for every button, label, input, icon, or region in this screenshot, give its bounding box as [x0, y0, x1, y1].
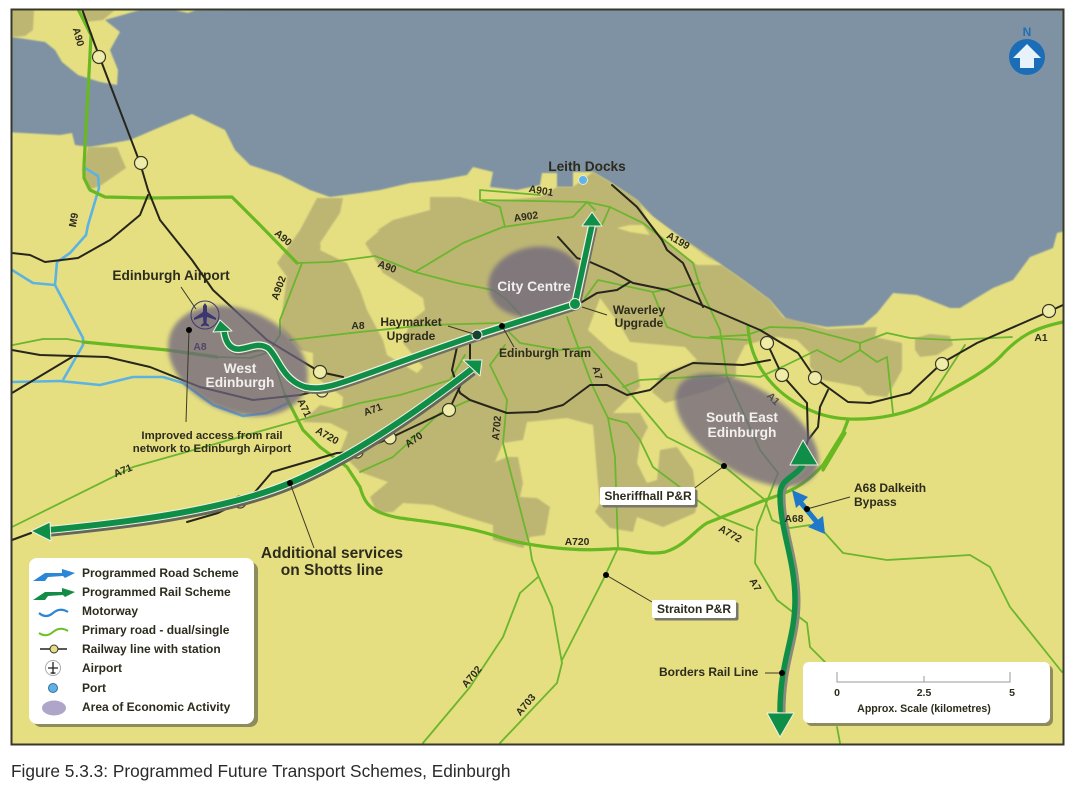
label: Haymarket Upgrade: Haymarket	[380, 315, 442, 329]
road labels: A772	[716, 524, 743, 545]
label: West Edinburgh: Edinburgh	[206, 375, 274, 390]
icon: airport	[191, 301, 219, 329]
scale box: 2.5	[917, 687, 931, 699]
label: West Edinburgh: West	[224, 361, 257, 376]
label: South East Edinburgh: Edinburgh	[708, 425, 776, 440]
label: A68 Dalkeith Bypass: Bypass	[854, 495, 897, 509]
area of economic activity: West Edinburgh	[166, 303, 310, 419]
legend	[29, 558, 258, 727]
label: improved access: Improved access from rail	[141, 430, 283, 442]
legend: motorway: Motorway	[82, 604, 138, 618]
road labels: A702	[460, 664, 485, 690]
legend: airport: Airport	[82, 661, 122, 675]
road labels: M9	[68, 212, 81, 228]
road labels: A8	[351, 321, 365, 332]
road labels: A68	[785, 514, 804, 525]
label: Waverley Upgrade: Upgrade	[615, 316, 664, 330]
label: Waverley Upgrade: Waverley	[613, 303, 665, 317]
label: Leith Docks: Leith Docks	[548, 159, 626, 174]
road labels: A8	[193, 342, 207, 353]
urban areas	[12, 10, 953, 548]
label: A68 Dalkeith Bypass: A68 Dalkeith	[854, 481, 926, 495]
label: Edinburgh Airport: Edinburgh Airport	[112, 268, 230, 283]
area of economic activity: City Centre	[486, 244, 580, 318]
icon: north arrow: N	[1023, 25, 1031, 39]
yellow pockets within urban area	[320, 205, 722, 373]
label: City Centre: City Centre	[497, 279, 571, 294]
legend: railway line with station: Railway line with station	[82, 642, 221, 656]
label: Straiton P&R	[652, 600, 738, 620]
road labels: A7	[589, 365, 604, 381]
area of economic activity: South East Edinburgh	[672, 371, 822, 489]
legend: primary road: Primary road - dual/single	[82, 623, 230, 637]
scale box: 5	[1009, 687, 1015, 699]
rail scheme: Shotts line arrow	[31, 360, 482, 541]
road labels: A90	[70, 27, 85, 48]
icon: north arrow	[1009, 25, 1045, 75]
road labels: A703	[514, 692, 539, 718]
road labels: A7	[747, 577, 763, 594]
label: Edinburgh Tram: Edinburgh Tram	[499, 346, 591, 360]
road labels: A71	[362, 402, 384, 419]
road labels: A199	[664, 231, 691, 252]
tram and upgrade points	[472, 298, 580, 340]
port: Leith Docks	[578, 176, 588, 184]
legend: motorway	[38, 606, 138, 618]
road labels: A702	[491, 415, 504, 441]
road labels: A720	[313, 426, 340, 447]
legend: programmed rail scheme	[33, 587, 230, 600]
scale box: 0	[834, 687, 840, 699]
road labels: A90	[376, 259, 398, 276]
legend: port: Port	[82, 681, 106, 695]
label: Borders Rail Line: Borders Rail Line	[659, 665, 759, 679]
road labels: A1	[1034, 333, 1048, 344]
rail scheme: Borders rail line arrow	[767, 440, 818, 737]
label: Sheriffhall P&R: Sheriffhall P&R	[604, 489, 692, 503]
legend: programmed road scheme	[33, 568, 238, 581]
label: additional services: Additional services	[261, 545, 403, 562]
road labels: A1	[764, 391, 781, 408]
label: Sheriffhall P&R	[600, 487, 698, 508]
legend: port	[48, 681, 106, 695]
road scheme: A68 Dalkeith Bypass arrow	[792, 490, 825, 534]
road labels: A90	[272, 228, 294, 249]
caption: Figure 5.3.3: Programmed Future Transport Schemes, Edinburgh	[11, 761, 510, 781]
road labels: A70	[403, 430, 425, 450]
rail scheme: airport to Leith arrow	[213, 212, 602, 390]
label: improved access: network to Edinburgh Airport	[133, 443, 291, 455]
road labels: A901	[528, 184, 554, 199]
label: Haymarket Upgrade: Upgrade	[387, 329, 436, 343]
legend: programmed rail scheme: Programmed Rail Scheme	[82, 585, 231, 599]
scale box: Approx. Scale (kilometres)	[857, 703, 991, 715]
railway lines	[12, 9, 1063, 540]
road labels: A902	[270, 274, 289, 302]
leader lines	[181, 287, 850, 676]
legend: airport	[46, 660, 122, 676]
label: Straiton P&R: Straiton P&R	[657, 602, 731, 616]
road labels: A71	[295, 397, 313, 419]
label: additional services: on Shotts line	[281, 562, 384, 579]
motorways	[12, 168, 290, 416]
sea: Firth of Forth	[5, 0, 1070, 327]
railway stations	[92, 50, 1056, 508]
legend: programmed road scheme: Programmed Road Scheme	[82, 566, 239, 580]
road labels: A720	[565, 537, 590, 548]
road labels: A71	[112, 463, 134, 480]
label: South East Edinburgh: South East	[706, 410, 778, 425]
road labels: A902	[513, 210, 539, 225]
legend: area of economic activity: Area of Economic Activity	[82, 700, 231, 714]
scale box	[803, 662, 1053, 726]
